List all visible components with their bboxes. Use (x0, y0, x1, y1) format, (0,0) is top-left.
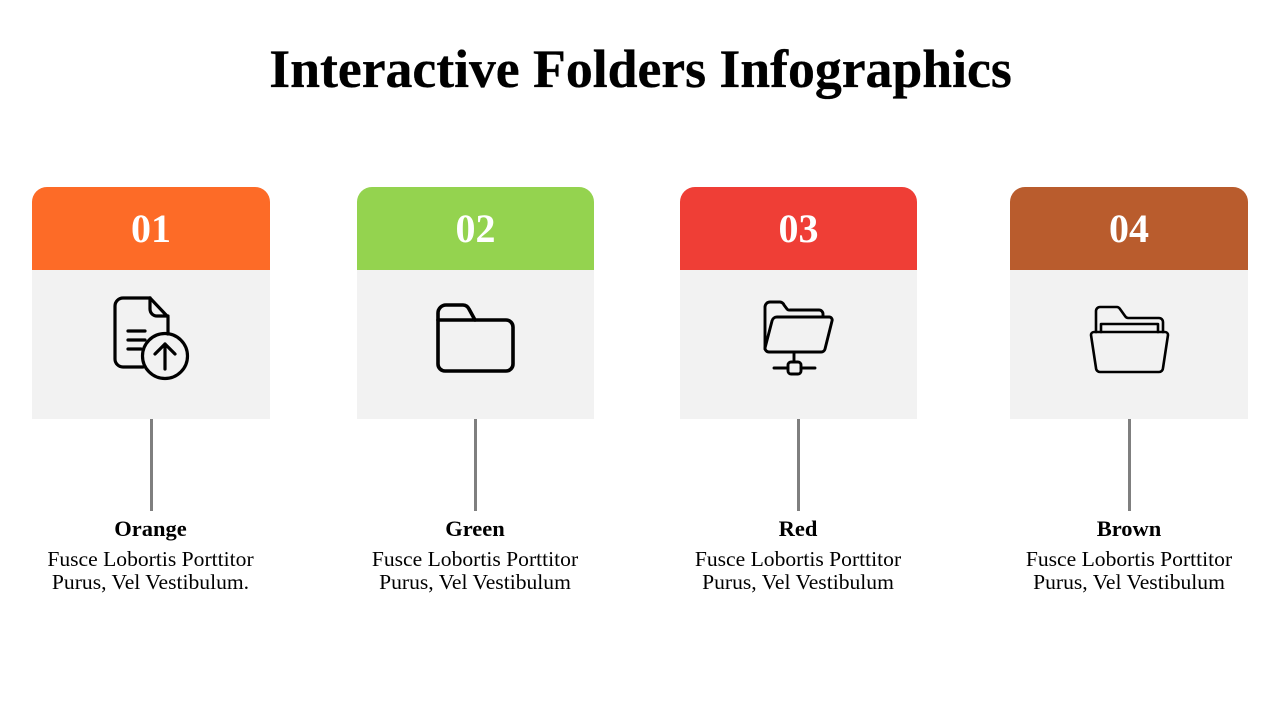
icon: network folder (765, 302, 832, 374)
text block: Orange: Orange (114, 516, 187, 541)
text block: Green: Green (445, 516, 505, 541)
text block: Red: Fusce Lobortis Porttitor (695, 547, 901, 571)
number header 02: 02 (456, 206, 496, 251)
text block: Brown: Purus, Vel Vestibulum (1033, 570, 1225, 594)
number header 04: 04 (1109, 206, 1149, 251)
panel: card 02 green (357, 187, 594, 419)
text block: Green (372, 516, 578, 594)
number header 04 (1010, 187, 1248, 270)
number header 02 (357, 187, 594, 270)
text block: Green: Fusce Lobortis Porttitor (372, 547, 578, 571)
panel: card 01 orange (32, 187, 270, 419)
text block: Red (695, 516, 901, 594)
title: Interactive Folders Infographics (269, 39, 1012, 99)
connector 02 (474, 419, 477, 511)
icon: open folder (1091, 307, 1168, 372)
text block: Orange: Fusce Lobortis Porttitor (47, 547, 254, 571)
text block: Orange (47, 516, 254, 594)
text block: Brown: Fusce Lobortis Porttitor (1026, 547, 1232, 571)
panel: card 04 brown (1010, 187, 1248, 419)
icon: document upload (115, 298, 188, 378)
number header 03: 03 (778, 206, 818, 251)
connector 01 (150, 419, 153, 511)
connector 03 (797, 419, 800, 511)
number header 01: 01 (131, 206, 171, 251)
number header 03 (680, 187, 917, 270)
number header 01 (32, 187, 270, 270)
icon: folder (438, 305, 513, 371)
text block: Brown: Brown (1097, 516, 1161, 541)
text block: Brown (1026, 516, 1232, 594)
panel: card 03 red (680, 187, 917, 419)
text block: Red: Purus, Vel Vestibulum (702, 570, 894, 594)
text block: Red: Red (779, 516, 817, 541)
text block: Orange: Purus, Vel Vestibulum. (52, 570, 249, 594)
connector 04 (1128, 419, 1131, 511)
text block: Green: Purus, Vel Vestibulum (379, 570, 571, 594)
